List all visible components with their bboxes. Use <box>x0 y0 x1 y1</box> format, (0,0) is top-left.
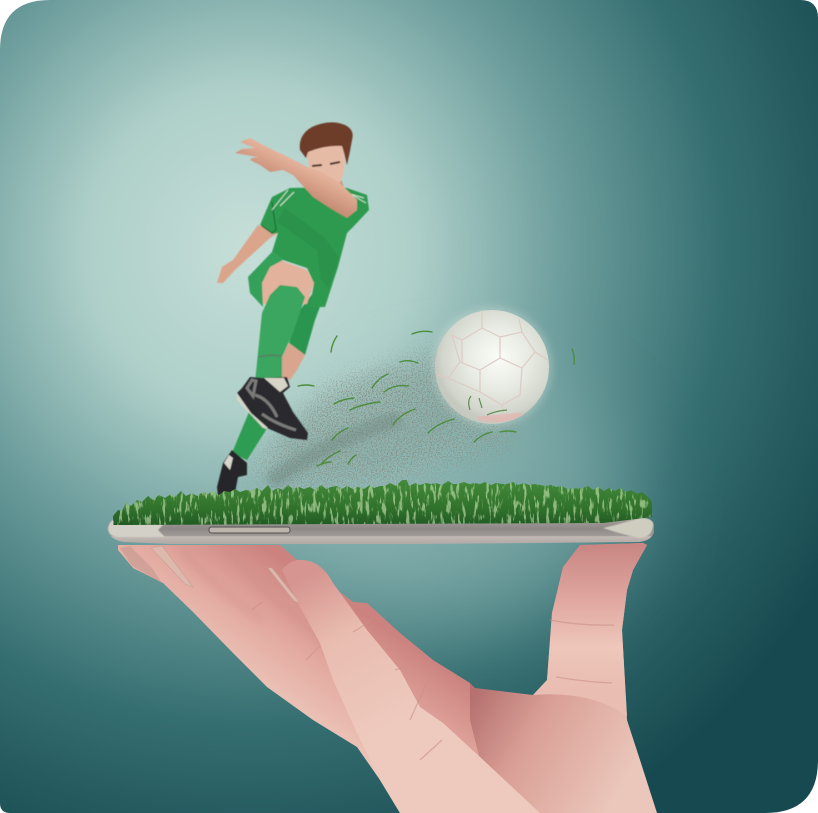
footballer <box>217 122 369 497</box>
shorts, near side <box>248 252 283 307</box>
ball panel seams <box>438 310 548 421</box>
knuckle creases <box>252 602 614 760</box>
grit over the ball <box>469 396 507 415</box>
shorts, far leg <box>289 288 327 355</box>
soft glow behind the hand <box>300 370 640 630</box>
jersey <box>260 187 369 307</box>
polished corners <box>108 519 165 537</box>
hair <box>300 122 353 165</box>
kicking boot <box>237 377 308 440</box>
back arm <box>217 225 278 283</box>
finger separation shadows <box>180 548 345 660</box>
bare calf <box>282 343 305 380</box>
fingernails <box>151 546 300 603</box>
standing sock <box>232 412 266 460</box>
grass flecks flying behind the ball <box>298 331 574 466</box>
pink reflection under the ball <box>478 414 522 421</box>
hand, background fingers <box>118 543 657 813</box>
standing boot <box>217 450 247 497</box>
side button <box>209 527 290 533</box>
dust trail behind the kick <box>250 340 530 500</box>
bare thigh <box>262 260 314 304</box>
palm and thumb <box>470 543 657 813</box>
neck and head <box>306 145 345 193</box>
kicking sock <box>255 285 305 382</box>
phone edge <box>108 518 654 544</box>
grass top of phone <box>113 480 652 525</box>
front arm and hand <box>235 138 357 218</box>
ball <box>432 307 552 427</box>
foreground finger <box>282 560 540 813</box>
